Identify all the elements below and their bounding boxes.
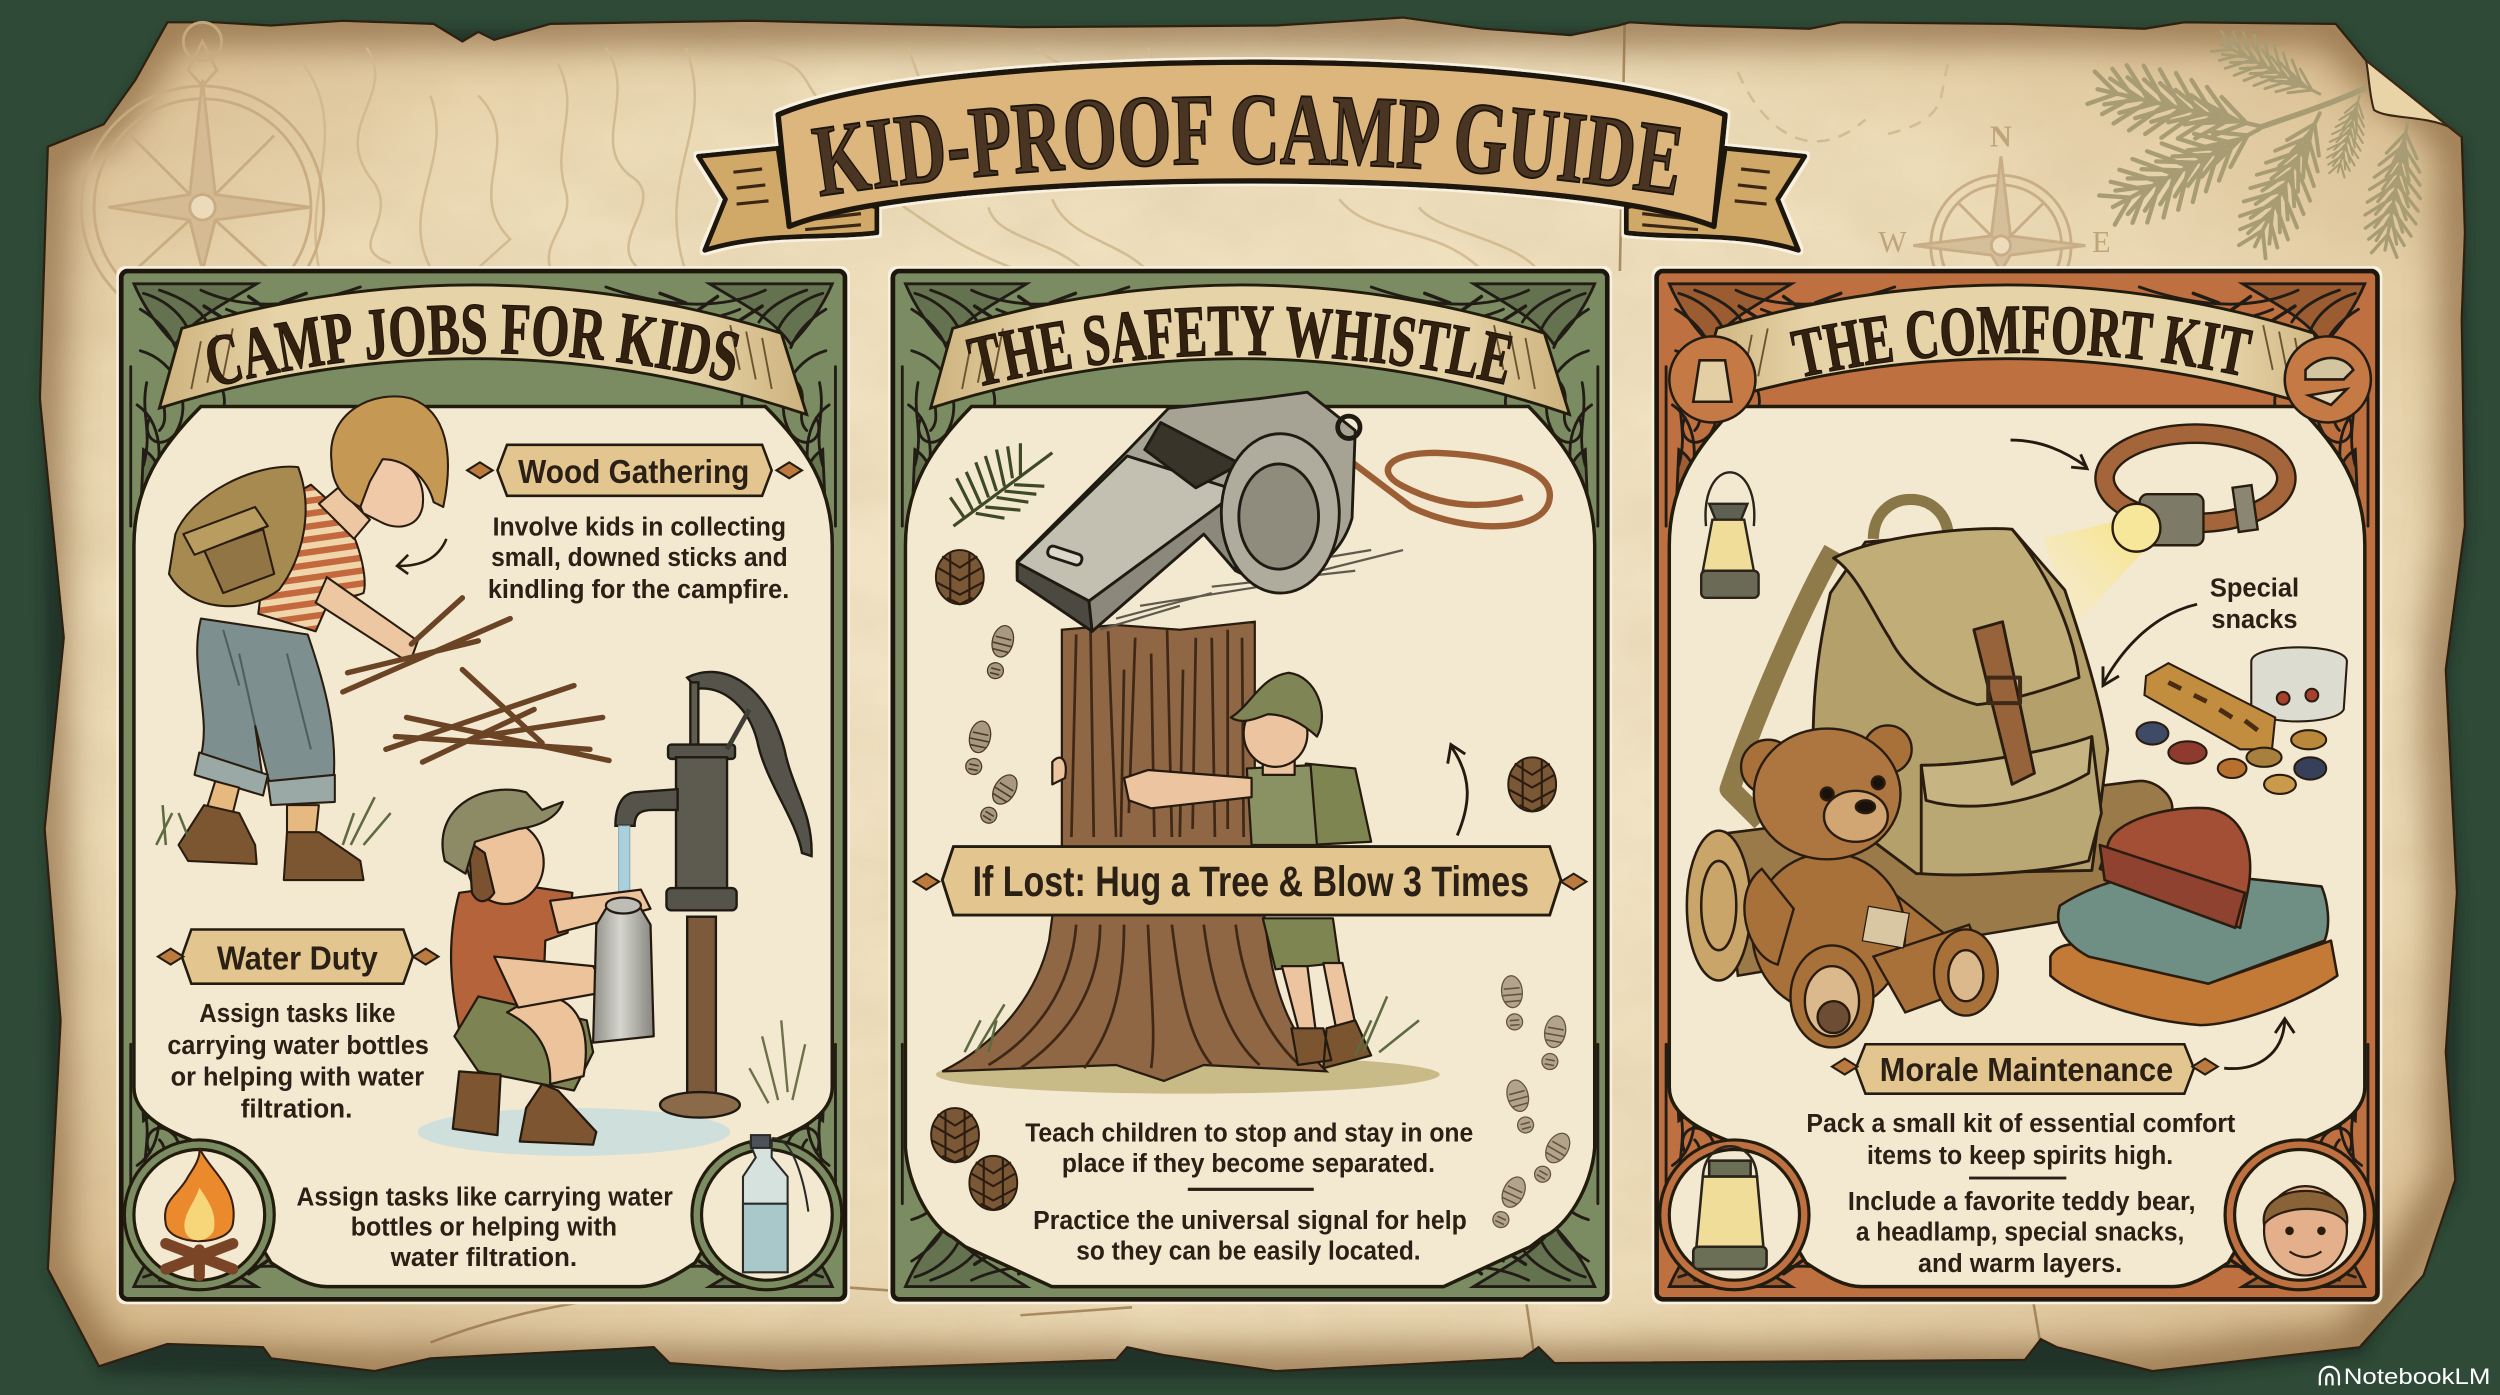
arrow — [1448, 745, 1467, 835]
icon: child face medallion — [2264, 1186, 2347, 1275]
text block: comfort kit: Pack a small kit of essential comfort — [1806, 1108, 2236, 1138]
text block: water duty: Assign tasks like — [199, 998, 395, 1028]
label: special snacks: snacks — [2211, 604, 2298, 634]
illustration: log — [1687, 781, 2172, 980]
compass rose: top right with cardinal letters: E — [2092, 225, 2111, 259]
label: wood gathering: Wood Gathering — [518, 454, 749, 491]
panel frame — [121, 271, 845, 1299]
label: if lost: If Lost: Hug a Tree & Blow 3 Times — [973, 858, 1529, 906]
compass rose: top right with cardinal letters: W — [1878, 225, 1907, 259]
text block: safety instructions — [1025, 1118, 1473, 1265]
panel frame — [1657, 271, 2378, 1299]
panel: the comfort kit — [1652, 266, 2382, 1304]
text block: bottom note: bottles or helping with — [351, 1212, 617, 1242]
illustration: boy gathering wood — [156, 396, 609, 880]
pine branch decoration — [2084, 21, 2433, 265]
text block: wood gathering: Involve kids in collecting — [493, 512, 786, 542]
text block: comfort kit — [1806, 1108, 2236, 1278]
panel heading: CAMP JOBS FOR KIDS — [207, 304, 740, 384]
label: morale maintenance — [1832, 1044, 2218, 1094]
label: special snacks — [2210, 572, 2299, 634]
compass rose: top right with cardinal letters — [1878, 120, 2111, 316]
illustration: teddy bear — [1741, 725, 1998, 1047]
ribbon shading — [733, 169, 1770, 230]
ribbon body — [778, 62, 1725, 226]
paper fold: top right corner — [2366, 61, 2462, 137]
text block: wood gathering — [488, 512, 789, 604]
panel heading: THE COMFORT KIT — [1789, 306, 2254, 377]
text block: comfort kit: items to keep spirits high. — [1867, 1140, 2173, 1170]
illustration: tree with roots — [936, 622, 1440, 1094]
illustration: headlamp — [2105, 434, 2286, 552]
panel frame — [893, 271, 1607, 1299]
text block: safety instructions: place if they become separated. — [1062, 1148, 1435, 1178]
panel: camp jobs for kids — [116, 266, 850, 1304]
icon: top left lantern medallion — [1669, 336, 1755, 422]
label: wood gathering — [467, 445, 802, 496]
panel: the safety whistle — [888, 266, 1612, 1304]
label: if lost — [914, 847, 1586, 915]
text block: comfort kit: Include a favorite teddy bear, — [1848, 1186, 2195, 1216]
icon: lantern medallion — [1693, 1146, 1767, 1269]
topographic contour lines — [303, 48, 1948, 271]
text block: wood gathering: kindling for the campfire. — [488, 574, 789, 604]
illustration: snacks — [2136, 647, 2347, 794]
arrow — [2011, 440, 2087, 469]
watermark: NotebookLM: NotebookLM — [2344, 1364, 2490, 1389]
text block: safety instructions: Practice the universal signal for help — [1033, 1205, 1467, 1235]
text block: bottom note: Assign tasks like carrying water — [297, 1181, 673, 1211]
illustration: water pump — [418, 672, 812, 1156]
illustration: backpack — [1730, 499, 2108, 875]
label: special snacks: Special — [2210, 572, 2299, 602]
panel heading: THE SAFETY WHISTLE — [965, 306, 1513, 386]
text block: water duty — [167, 998, 429, 1124]
illustration: folded clothes — [2050, 808, 2337, 1025]
icon: campfire — [165, 1148, 234, 1275]
compass rose: top right with cardinal letters: N — [1990, 120, 2012, 154]
icon: water bottle — [743, 1135, 808, 1272]
illustration: grass — [965, 996, 1419, 1055]
label: morale maintenance: Morale Maintenance — [1880, 1052, 2173, 1089]
ribbon tails — [698, 148, 1805, 250]
main title: KID-PROOF CAMP GUIDE — [810, 94, 1682, 197]
icon: footprints left — [962, 623, 1022, 827]
text block: wood gathering: small, downed sticks and — [491, 542, 788, 572]
title ribbon — [694, 57, 1810, 256]
text block: safety instructions: so they can be easily located. — [1076, 1235, 1421, 1265]
text block: water duty: or helping with water — [171, 1062, 424, 1092]
compass rose: top left — [81, 22, 324, 328]
illustration: boy filling bottle — [443, 790, 654, 1145]
icon: pine cones — [931, 550, 1556, 1210]
icon: footprints right — [1488, 975, 1575, 1231]
icon: pine sprig — [950, 443, 1052, 526]
icon: lantern — [1701, 472, 1759, 598]
illustration: boy hugging tree — [1052, 673, 1371, 1068]
label: water duty: Water Duty — [217, 940, 378, 977]
arrow — [2224, 1019, 2294, 1069]
text block: bottom note — [297, 1181, 673, 1272]
text block: water duty: filtration. — [241, 1094, 352, 1124]
illustration: light beam — [2042, 518, 2144, 625]
arrow — [397, 539, 446, 574]
text block: water duty: carrying water bottles — [167, 1030, 429, 1060]
arrow — [2103, 604, 2197, 686]
label: water duty — [158, 929, 438, 984]
text block: bottom note: water filtration. — [390, 1242, 577, 1272]
text block: safety instructions: Teach children to stop and stay in one — [1025, 1118, 1473, 1148]
text block: comfort kit: and warm layers. — [1918, 1248, 2122, 1278]
text block: comfort kit: a headlamp, special snacks, — [1856, 1216, 2184, 1246]
icon: top right medallion — [2285, 336, 2371, 422]
illustration: whistle and lanyard — [1017, 392, 1550, 631]
illustration: water stream — [619, 826, 630, 909]
